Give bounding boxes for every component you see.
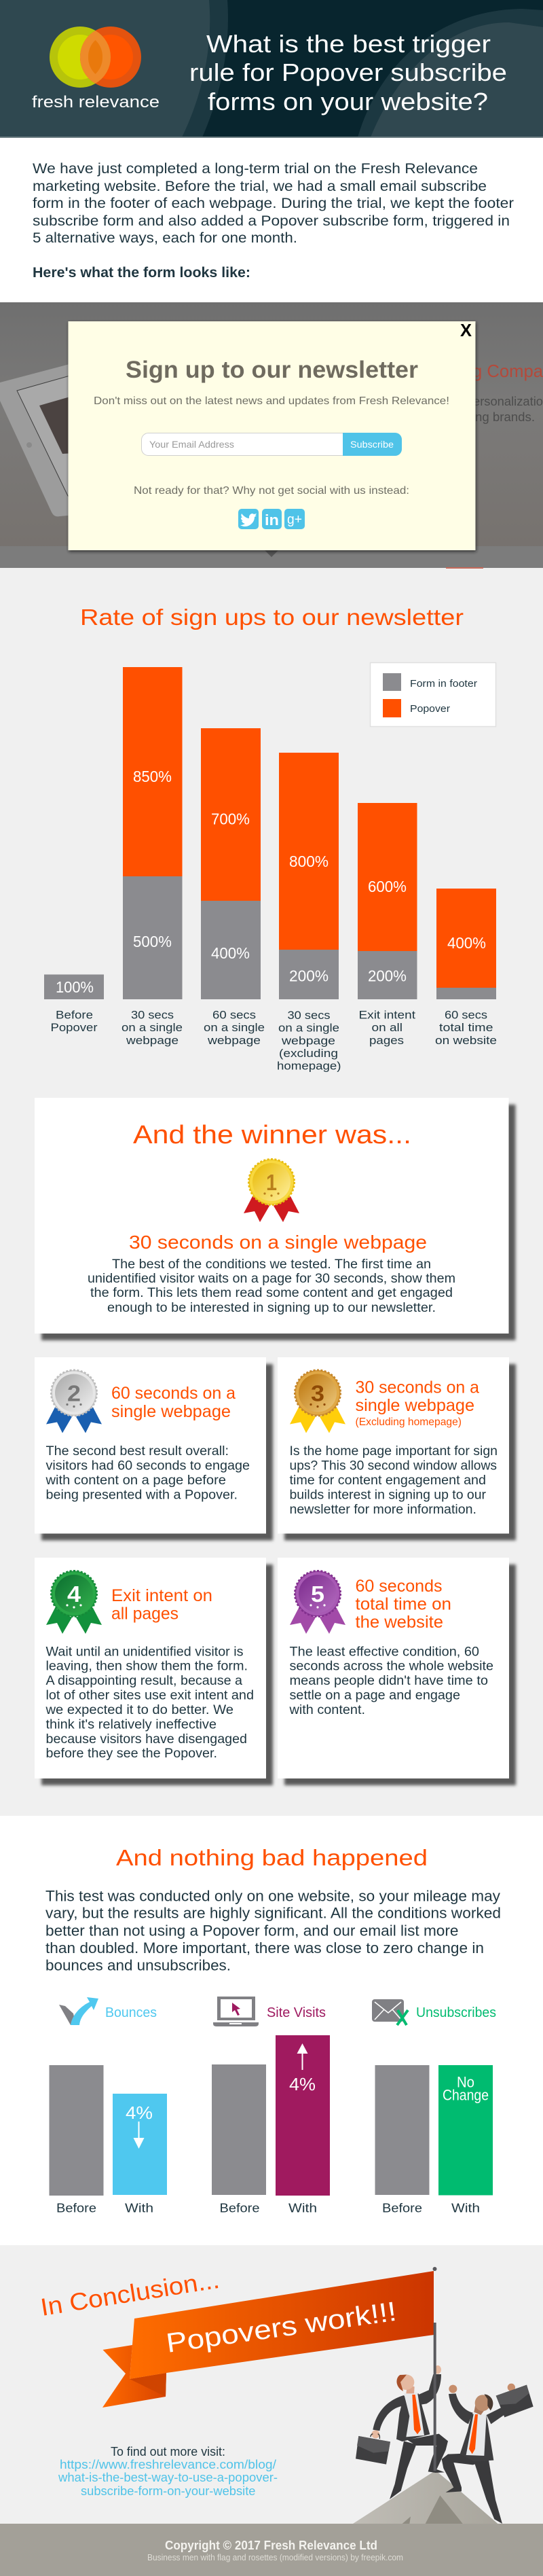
section body text: better than not using a Popover form, and our email list more [45, 1922, 459, 1939]
tablet [0, 363, 75, 516]
subscribe button: Subscribe [350, 439, 394, 450]
icon: bronze medal [290, 1370, 345, 1433]
bar: 60 secs on a single webpage: on a single [204, 1021, 265, 1034]
background page text [472, 361, 543, 424]
bar: 30 secs on a single webpage: webpage [126, 1034, 179, 1047]
bar: 30 secs excluding homepage: webpage [281, 1034, 335, 1048]
third place description: builds interest in signing up to our [289, 1488, 487, 1503]
fourth place description: leaving, then show them the form. [46, 1660, 248, 1674]
bar: 30 secs on a single webpage: 30 secs [131, 1008, 174, 1022]
chart legend: Form in footer [410, 678, 477, 690]
bar: visits with [276, 2035, 330, 2196]
logo: fresh relevance: fresh relevance [32, 93, 160, 111]
section: nothing bad happened [0, 1816, 543, 2245]
bar: before popover: 100% [56, 978, 94, 996]
intro section [0, 138, 543, 302]
icon: google plus: g+ [287, 512, 302, 527]
intro text: marketing website. Before the trial, we had a small email subscribe [33, 179, 487, 194]
briefcase [356, 2436, 390, 2465]
bar: 30 secs excluding homepage: 200% [289, 967, 329, 985]
fourth place title: all pages [111, 1605, 179, 1624]
fifth place description: seconds across the whole website [289, 1660, 493, 1674]
winner heading: And the winner was... [133, 1121, 411, 1149]
icon: purple medal: 5 [311, 1581, 324, 1607]
fifth place title [356, 1577, 451, 1632]
section body text: This test was conducted only on one website, so your mileage may [45, 1887, 500, 1904]
third place title [356, 1378, 479, 1428]
panel: second place [35, 1357, 266, 1534]
flag text: Popovers work!!! [164, 2297, 398, 2359]
bar: exit intent on all pages: pages [369, 1034, 404, 1047]
flag pole top cap [433, 2267, 437, 2271]
third place description: time for content engagement and [289, 1473, 486, 1488]
bar: unsubscribes before [375, 2065, 429, 2195]
label: unsubscribes: Unsubscribes [416, 2005, 496, 2020]
icon: gold medal [244, 1159, 299, 1222]
fourth place title: Exit intent on [111, 1586, 212, 1605]
conclusion heading: In Conclusion... [39, 2266, 221, 2321]
website screenshot behind popup [0, 302, 543, 569]
fifth place title: 60 seconds [356, 1577, 443, 1596]
man two [442, 2384, 533, 2524]
bar: 60 secs on a single webpage: 700% [211, 810, 250, 827]
bar: before popover: Popover [50, 1021, 98, 1034]
icon: laptop [213, 1997, 259, 2026]
title: What is the best trigger [206, 30, 491, 58]
fourth place description: think it's relatively ineffective [46, 1717, 217, 1732]
copyright: Copyright © 2017 Fresh Relevance Ltd [165, 2539, 377, 2552]
bar: 60 secs total time: 60 secs [445, 1008, 487, 1022]
background page text: ng brands. [475, 410, 535, 424]
flag pole [434, 2323, 436, 2471]
form lead-in: Here's what the form looks like: [33, 265, 250, 281]
fourth place description: we expected it to do better. We [45, 1703, 233, 1717]
fifth place description: settle on a page and engage [289, 1689, 460, 1703]
axis labels [220, 2202, 317, 2215]
third place title: (Excluding homepage) [356, 1416, 462, 1428]
label: site visits: Site Visits [267, 2005, 326, 2020]
third place description: ups? This 30 second window allows [289, 1459, 497, 1473]
bar: before popover: Before [56, 1008, 93, 1022]
second place title: 60 seconds on a [111, 1384, 236, 1403]
bar: 60 secs on a single webpage [201, 728, 265, 1047]
fifth place description: with content. [288, 1703, 365, 1717]
popup heading: Sign up to our newsletter [126, 357, 418, 383]
bar: visits before [212, 2064, 266, 2195]
bar: exit intent on all pages: on all [372, 1021, 402, 1034]
footer [0, 2524, 543, 2576]
axis labels: With [125, 2202, 153, 2215]
bar: unsubscribes with [438, 2065, 493, 2196]
winner description [88, 1257, 455, 1315]
link: subscribe-form-on-your-website [81, 2484, 255, 2498]
second place title: single webpage [111, 1402, 231, 1421]
winner description: The best of the conditions we tested. The first time an [112, 1257, 431, 1272]
illustration: businessmen on mountain [353, 2323, 533, 2524]
panel: fourth place [35, 1558, 266, 1778]
bar: exit intent on all pages: 200% [368, 967, 407, 985]
intro text: form in the footer of each webpage. During the trial, we kept the footer [33, 196, 514, 211]
second place description: being presented with a Popover. [46, 1488, 238, 1503]
bar: unsubscribes with: No [457, 2074, 474, 2091]
title [189, 30, 507, 115]
intro text: 5 alternative ways, each for one month. [33, 230, 297, 246]
second place description: visitors had 60 seconds to engage [46, 1459, 250, 1473]
chart legend: Popover [410, 703, 450, 715]
logo: fresh relevance [32, 26, 160, 111]
axis labels: Before [220, 2202, 259, 2215]
icon: envelope with cross [372, 1999, 408, 2025]
fifth place title: total time on [356, 1594, 451, 1613]
background page text: g Compa [472, 361, 543, 381]
third place title: 30 seconds on a [356, 1378, 479, 1397]
icon: linkedin: in [265, 512, 279, 529]
icon: bronze medal: 3 [311, 1380, 324, 1406]
fourth place description [45, 1645, 254, 1761]
third place title: single webpage [356, 1396, 474, 1415]
icon: linkedin [262, 509, 282, 529]
chart legend [371, 663, 495, 727]
fourth place description: A disappointing result, because a [46, 1674, 242, 1688]
bar: 30 secs excluding homepage: (excluding [279, 1047, 338, 1060]
intro text [33, 161, 514, 246]
call to action text [58, 2445, 278, 2498]
bar: exit intent on all pages: 600% [368, 878, 407, 895]
bar: 60 secs total time: on website [435, 1034, 497, 1047]
bar: 30 secs on a single webpage [121, 667, 183, 1047]
fifth place title: the website [356, 1613, 443, 1632]
bar: 60 secs total time: total time [439, 1021, 493, 1034]
fourth place description: because visitors have disengaged [46, 1732, 247, 1747]
label: bounces: Bounces [105, 2005, 157, 2020]
bar: bounces with: 4% [126, 2103, 153, 2123]
close button: X [460, 320, 472, 340]
mountain [353, 2471, 498, 2524]
section heading: rate of sign ups: Rate of sign ups to our newsletter [80, 605, 464, 630]
stacked bar chart [44, 663, 497, 1072]
bar: 60 secs on a single webpage: webpage [207, 1034, 261, 1047]
bar: 30 secs on a single webpage: 500% [133, 933, 172, 950]
bar: before popover [44, 974, 104, 1034]
credits: Business men with flag and rosettes (modified versions) by freepik.com [147, 2552, 403, 2562]
link: https://www.freshrelevance.com/blog/ [60, 2458, 276, 2471]
bar: 30 secs excluding homepage: homepage) [277, 1060, 341, 1072]
briefcase [496, 2385, 533, 2417]
section body text: bounces and unsubscribes. [45, 1957, 231, 1974]
call to action text: To find out more visit: [111, 2445, 225, 2458]
link [58, 2458, 278, 2498]
popup subscribe form [68, 320, 475, 550]
intro text: subscribe form and also added a Popover subscribe form, triggered in [33, 213, 510, 229]
title: forms on your website? [208, 88, 488, 115]
chart: unsubscribes [372, 1999, 496, 2215]
icon: bounce arrow [59, 1997, 98, 2025]
second place description [45, 1444, 250, 1503]
second place description: The second best result overall: [46, 1444, 229, 1459]
email input: Your Email Address [149, 439, 234, 450]
fifth place description: The least effective condition, 60 [289, 1645, 479, 1659]
icon: gold medal: 1 [266, 1170, 277, 1195]
axis labels: With [288, 2202, 317, 2215]
chart: site visits [212, 1997, 330, 2215]
chart: bounces [49, 1997, 167, 2215]
bar: bounces before [49, 2065, 103, 2196]
bar: 30 secs on a single webpage: 850% [133, 768, 172, 785]
icon: green medal: 4 [67, 1581, 81, 1607]
bar: 60 secs on a single webpage: 60 secs [212, 1008, 256, 1022]
winner name: 30 seconds on a single webpage [129, 1232, 427, 1253]
link: what-is-the-best-way-to-use-a-popover- [58, 2471, 278, 2484]
popup subheading: Don't miss out on the latest news and updates from Fresh Relevance! [94, 395, 449, 407]
icon: green medal [46, 1571, 102, 1634]
bar: 30 secs excluding homepage: on a single [278, 1022, 339, 1034]
winner description: enough to be interested in signing up to our newsletter. [107, 1301, 436, 1315]
axis labels: With [451, 2202, 480, 2215]
third place description [289, 1444, 498, 1517]
email input [141, 433, 402, 455]
fourth place description: before they see the Popover. [46, 1747, 217, 1761]
panel: winner [35, 1098, 509, 1334]
winner description: the form. This lets them read some content and get engaged [90, 1286, 453, 1300]
fourth place description: Wait until an unidentified visitor is [46, 1645, 243, 1659]
flag banner [102, 2271, 434, 2408]
axis labels [382, 2202, 480, 2215]
fifth place description [288, 1645, 493, 1717]
second place title [111, 1384, 236, 1421]
axis labels [56, 2202, 153, 2215]
fifth place description: means people didn't have time to [289, 1674, 488, 1688]
header banner [0, 0, 543, 138]
axis labels: Before [382, 2202, 422, 2215]
section body text: vary, but the results are highly significant. All the conditions worked [45, 1905, 501, 1922]
bar: 30 secs on a single webpage: on a single [121, 1021, 183, 1034]
fourth place description: lot of other sites use exit intent and [46, 1689, 254, 1703]
section body text [45, 1887, 501, 1974]
icon: google plus [284, 509, 305, 529]
third place description: newsletter for more information. [289, 1503, 476, 1517]
icon: silver medal [46, 1370, 102, 1433]
social prompt: Not ready for that? Why not get social with us instead: [134, 485, 409, 497]
fourth place title [111, 1586, 212, 1624]
man one back leg [390, 2441, 416, 2499]
man one [356, 2365, 448, 2473]
background page text: ersonalizatio [473, 395, 543, 408]
bar: 60 secs total time: 400% [447, 934, 486, 952]
title: rule for Popover subscribe [189, 58, 507, 86]
axis labels: Before [56, 2202, 96, 2215]
bar: 30 secs excluding homepage: 30 secs [288, 1009, 330, 1022]
bar: exit intent on all pages: Exit intent [358, 1008, 415, 1022]
intro text: We have just completed a long-term trial on the Fresh Relevance [33, 161, 478, 177]
bar: unsubscribes with: Change [443, 2087, 489, 2104]
winner description: unidentified visitor waits on a page for 30 seconds, show them [88, 1272, 455, 1286]
third place description: Is the home page important for sign [289, 1444, 498, 1459]
icon: silver medal: 2 [67, 1380, 81, 1406]
bar: bounces with [113, 2094, 167, 2195]
bar: 30 secs excluding homepage [277, 753, 341, 1072]
icon: purple medal [290, 1571, 345, 1634]
bar: 60 secs total time [435, 889, 497, 1047]
bar: visits with: 4% [289, 2074, 316, 2094]
icon: twitter [238, 509, 259, 529]
panel: third place [278, 1357, 509, 1534]
second place description: with content on a page before [45, 1473, 226, 1488]
bar: 60 secs on a single webpage: 400% [211, 944, 250, 962]
section body text: than doubled. More important, there was close to zero change in [45, 1939, 484, 1956]
bar: exit intent on all pages [358, 803, 417, 1047]
section heading: And nothing bad happened [116, 1845, 428, 1870]
subscribe button [343, 433, 402, 456]
panel: fifth place [278, 1558, 509, 1778]
bar: 30 secs excluding homepage: 800% [289, 853, 329, 870]
